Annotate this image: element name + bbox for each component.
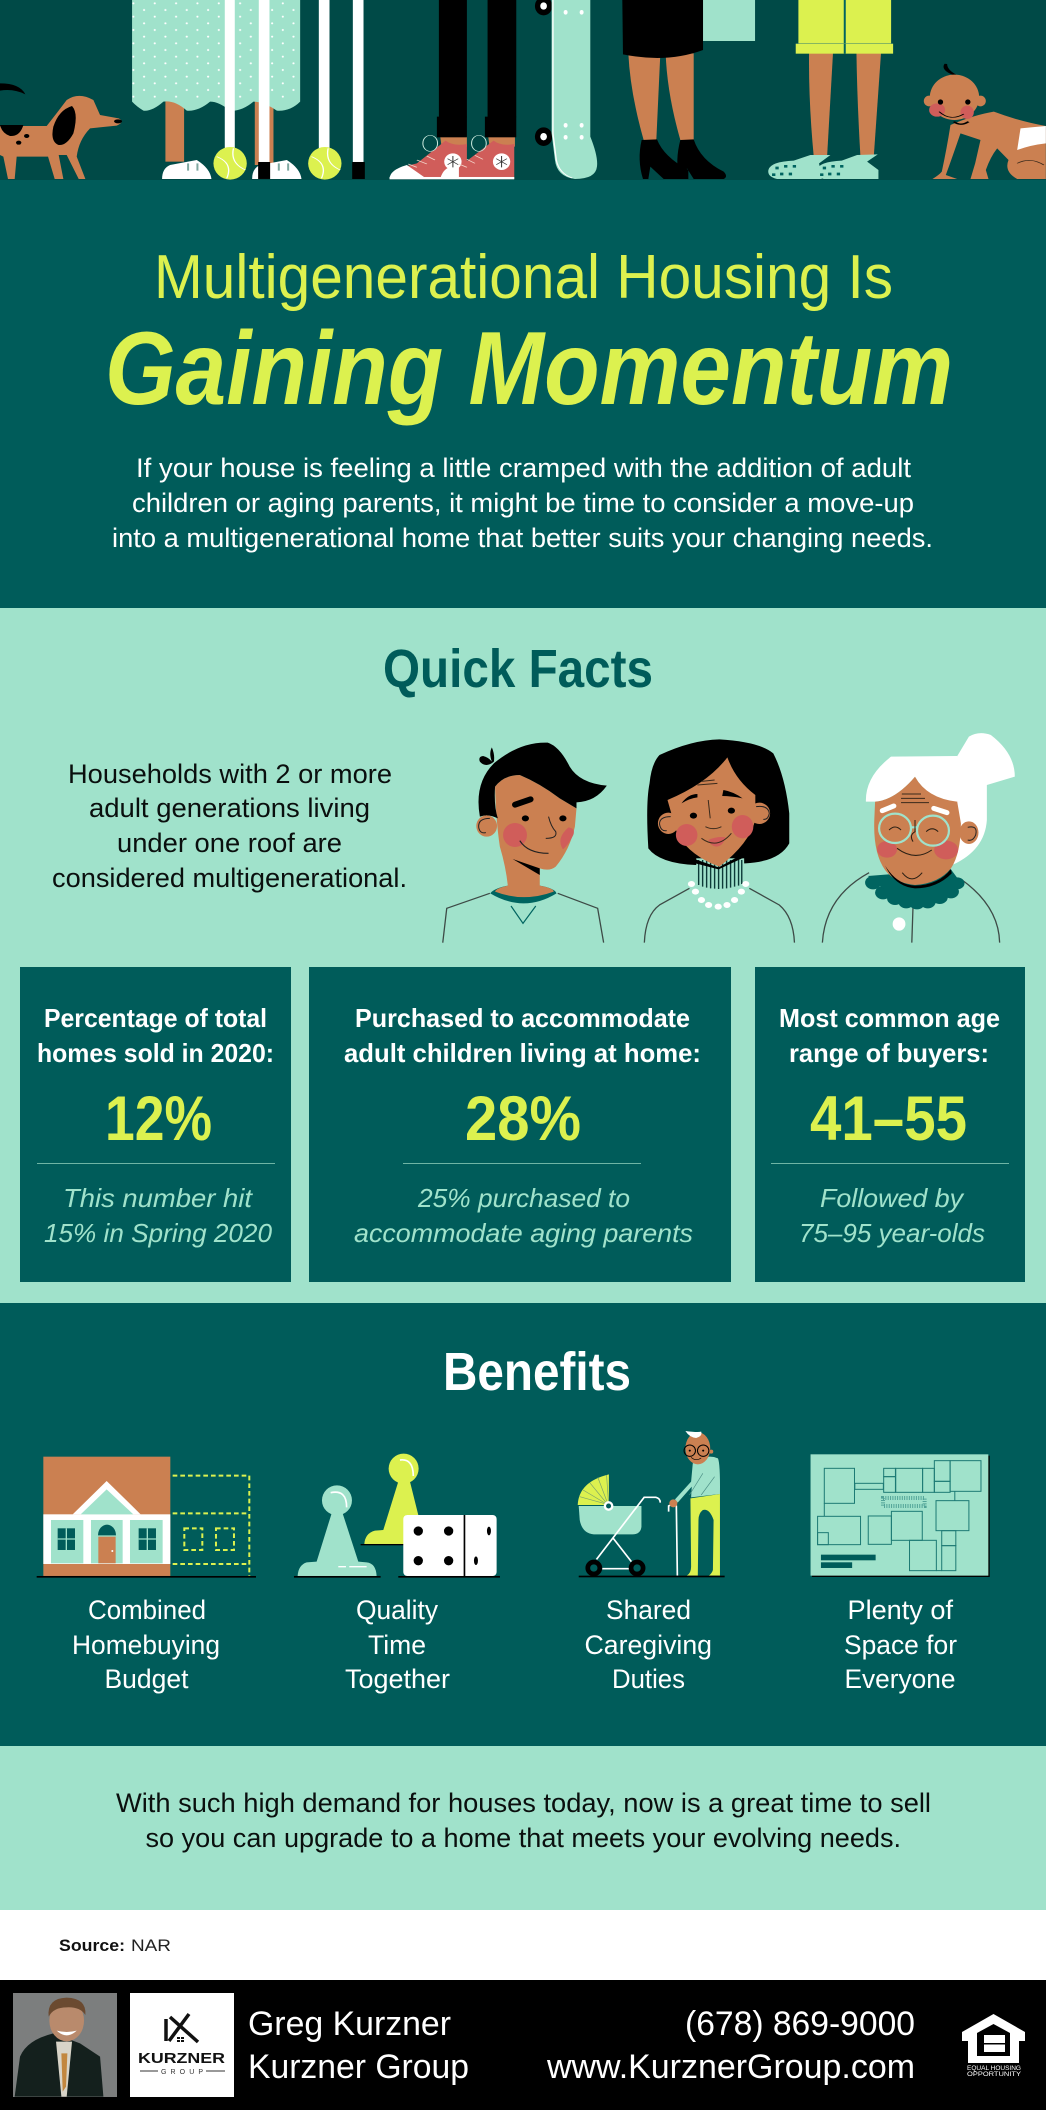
text block: definition xyxy=(52,759,407,893)
panel: source xyxy=(0,1910,1046,1980)
card: purchased for adult children: accommodate aging parents xyxy=(354,1218,693,1248)
card: most common age range: Most common age xyxy=(779,1003,1000,1033)
icon: equal housing opportunity: OPPORTUNITY xyxy=(967,2071,1022,2078)
intro paragraph: into a multigenerational home that better suits your changing needs. xyxy=(112,523,933,553)
icon: young man portrait xyxy=(443,743,607,943)
panel: call to action xyxy=(0,1746,1046,1910)
icon: skateboard xyxy=(535,0,597,179)
agent name and company: Greg Kurzner xyxy=(248,2005,451,2043)
photo: agent portrait xyxy=(13,1993,117,2097)
intro paragraph: children or aging parents, it might be time to consider a move-up xyxy=(132,488,914,518)
icon: man in shorts and clogs xyxy=(768,0,893,179)
label: plenty of space for everyone xyxy=(844,1595,957,1694)
card: percentage of total homes sold: homes sold in 2020: xyxy=(37,1038,274,1068)
icon: board game pawns and dice xyxy=(294,1454,500,1578)
icon: walker with tennis balls xyxy=(213,0,365,180)
label: combined homebuying budget xyxy=(72,1595,220,1694)
label: plenty of space for everyone: Plenty of xyxy=(848,1595,953,1625)
panel: source: NAR xyxy=(131,1936,171,1955)
text block: definition: Households with 2 or more xyxy=(68,759,392,789)
card: percentage of total homes sold: 15% in Spring 2020 xyxy=(44,1218,273,1248)
label: quality time together xyxy=(345,1595,450,1694)
card: percentage of total homes sold: 12% xyxy=(105,1084,212,1154)
card: purchased for adult children: 25% purchased to xyxy=(417,1183,630,1213)
label: shared caregiving duties: Shared xyxy=(606,1595,691,1625)
agent name and company xyxy=(248,2005,469,2086)
logo: Kurzner Group xyxy=(130,1993,234,2097)
card: most common age range: 75–95 year-olds xyxy=(799,1218,985,1248)
label: plenty of space for everyone: Everyone xyxy=(844,1664,956,1694)
agent name and company: Kurzner Group xyxy=(248,2048,469,2086)
intro paragraph: If your house is feeling a little cramped with the addition of adult xyxy=(136,453,911,483)
label: plenty of space for everyone: Space for xyxy=(844,1630,957,1660)
contact details: (678) 869-9000 xyxy=(685,2005,915,2043)
contact details: www.KurznerGroup.com xyxy=(546,2048,915,2086)
card: most common age range xyxy=(755,967,1025,1282)
contact details xyxy=(546,2005,915,2086)
heading: benefits: Benefits xyxy=(443,1342,631,1402)
heading: quick facts: Quick Facts xyxy=(383,639,653,699)
panel: quick facts xyxy=(0,608,1046,1303)
card: purchased for adult children: 28% xyxy=(465,1084,581,1154)
icon: grandfather with stroller xyxy=(578,1431,725,1577)
card: purchased for adult children: adult children living at home: xyxy=(344,1038,701,1068)
panel: header xyxy=(0,180,1046,608)
label: shared caregiving duties: Duties xyxy=(612,1664,685,1694)
icon: grandmother dress and legs xyxy=(132,0,301,179)
label: combined homebuying budget: Combined xyxy=(88,1595,206,1625)
text block: definition: considered multigenerational. xyxy=(52,863,407,893)
card: percentage of total homes sold: Percentage of total xyxy=(44,1003,267,1033)
icon: grandmother portrait xyxy=(822,733,1015,943)
card: most common age range: range of buyers: xyxy=(789,1038,989,1068)
label: shared caregiving duties: Caregiving xyxy=(584,1630,712,1660)
card: percentage of total homes sold xyxy=(20,967,291,1282)
icon: equal housing opportunity xyxy=(962,2014,1025,2078)
icon: woman portrait xyxy=(644,739,794,943)
icon: house with dashed addition xyxy=(37,1457,256,1578)
label: combined homebuying budget: Homebuying xyxy=(72,1630,220,1660)
label: quality time together: Time xyxy=(368,1630,426,1660)
icon: crawling baby xyxy=(924,64,1046,179)
panel: call to action: With such high demand for houses today, now is a great time to sell xyxy=(116,1788,931,1818)
panel: agent footer xyxy=(0,1980,1046,2110)
text block: definition: adult generations living xyxy=(89,793,370,823)
icon: teen legs and sneakers xyxy=(390,0,516,179)
logo: Kurzner Group: GROUP xyxy=(161,2069,203,2076)
top illustration: family legs xyxy=(0,0,1046,180)
panel: source: Source: xyxy=(59,1936,125,1955)
label: quality time together: Quality xyxy=(356,1595,438,1625)
intro paragraph xyxy=(112,453,933,553)
logo: Kurzner Group: KURZNER xyxy=(138,2051,226,2067)
card: most common age range: Followed by xyxy=(820,1183,965,1213)
label: shared caregiving duties xyxy=(584,1595,712,1694)
card: purchased for adult children: Purchased to accommodate xyxy=(355,1003,690,1033)
icon: equal housing opportunity: EQUAL HOUSING xyxy=(967,2065,1021,2072)
label: quality time together: Together xyxy=(345,1664,450,1694)
icon: floor plan xyxy=(811,1454,990,1577)
title line one: Multigenerational Housing Is xyxy=(154,243,893,312)
panel: call to action: so you can upgrade to a home that meets your evolving needs. xyxy=(146,1823,901,1853)
illustration: three generations portraits xyxy=(443,733,1015,943)
card: most common age range: 41–55 xyxy=(810,1084,967,1154)
label: combined homebuying budget: Budget xyxy=(104,1664,189,1694)
icon: dog xyxy=(0,83,122,179)
text block: definition: under one roof are xyxy=(117,828,342,858)
card: percentage of total homes sold: This number hit xyxy=(63,1183,254,1213)
panel: benefits xyxy=(0,1303,1046,1746)
icon: woman with skirt, bag and heels xyxy=(622,0,755,179)
card: purchased for adult children xyxy=(309,967,731,1282)
